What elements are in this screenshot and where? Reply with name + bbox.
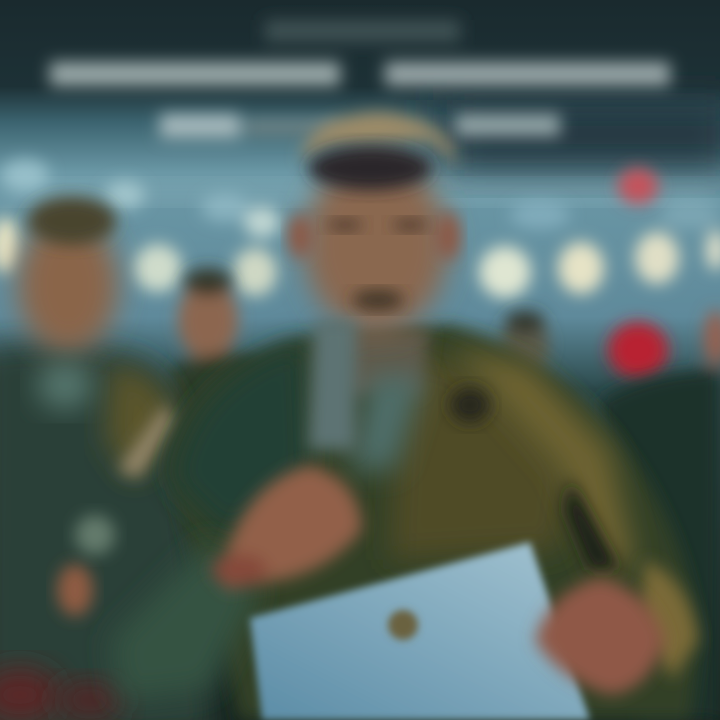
red flags in background bbox=[608, 168, 668, 378]
background soldiers bbox=[170, 268, 720, 720]
microphone bbox=[308, 320, 356, 450]
tablet held by the soldier bbox=[250, 542, 590, 720]
main soldier: head and cap bbox=[288, 112, 460, 470]
left soldier bbox=[0, 197, 215, 720]
ceiling and wall lights bbox=[0, 159, 720, 298]
main soldier: raised hand bbox=[212, 465, 362, 590]
title placeholder: illegible blurred heading bbox=[50, 20, 670, 138]
main soldier: right hand bbox=[535, 578, 665, 695]
main soldier: torso bbox=[110, 325, 700, 720]
